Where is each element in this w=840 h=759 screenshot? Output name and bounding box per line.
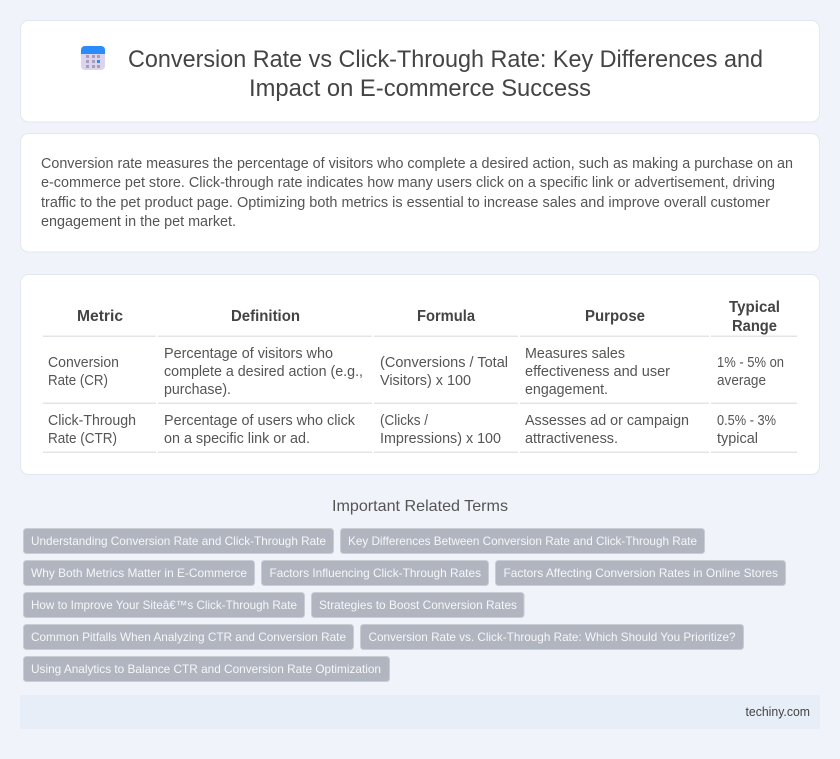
- chip: Factors Affecting Conversion Rates in Online Stores: [504, 566, 778, 580]
- chip: Factors Influencing Click-Through Rates: [270, 566, 481, 580]
- title: Impact on E-commerce Success: [249, 75, 591, 102]
- table row: conversion rate: engagement.: [525, 382, 608, 398]
- table header: Definition: [231, 308, 300, 325]
- table row: click-through rate: Impressions) x 100: [380, 431, 501, 447]
- table row: conversion rate: average: [717, 373, 766, 389]
- table header: Range: [732, 318, 777, 335]
- panel: introduction: [20, 134, 820, 252]
- text block: introduction paragraph: e-commerce pet store. Click-through rate indicates how many users click on a specific link or advertisement, driving: [41, 175, 775, 191]
- table row: click-through rate: Percentage of users who click: [164, 413, 356, 429]
- table row: conversion rate: Percentage of visitors who: [164, 346, 333, 362]
- heading: important related terms: Important Related Terms: [332, 498, 508, 515]
- table row: conversion rate: Rate (CR): [48, 373, 108, 389]
- table row: click-through rate: typical: [717, 431, 758, 447]
- table row: click-through rate: Click-Through: [48, 413, 136, 429]
- table row: conversion rate: Visitors) x 100: [380, 373, 471, 389]
- chip: [24, 560, 254, 586]
- panel: comparison table: [20, 274, 820, 474]
- chip: [24, 624, 354, 650]
- table row: click-through rate: Rate (CTR): [48, 431, 117, 447]
- table header: [77, 299, 780, 335]
- table row: click-through rate: [48, 413, 776, 447]
- chip: Why Both Metrics Matter in E-Commerce: [31, 566, 247, 580]
- title: [128, 46, 763, 102]
- chip: [262, 560, 488, 586]
- table row: click-through rate: (Clicks /: [380, 413, 428, 429]
- chip: [24, 656, 390, 682]
- table header: Metric: [77, 308, 123, 325]
- table row: conversion rate: [48, 346, 784, 398]
- chip: [24, 592, 304, 618]
- table row: conversion rate: (Conversions / Total: [380, 355, 508, 371]
- chip: [340, 528, 704, 554]
- table row: click-through rate: attractiveness.: [525, 431, 618, 447]
- text block: introduction paragraph: [41, 156, 793, 230]
- table header: Purpose: [585, 308, 645, 325]
- text block: introduction paragraph: traffic to the pet product page. Optimizing both metrics is essential to increase sales and improve overall customer: [41, 195, 770, 211]
- table row: conversion rate: 1% - 5% on: [717, 355, 784, 371]
- panel: related term chips: [24, 528, 786, 682]
- chip: How to Improve Your Siteâ€™s Click-Through Rate: [31, 598, 297, 612]
- chip: Strategies to Boost Conversion Rates: [319, 598, 517, 612]
- chip: [312, 592, 524, 618]
- footer: techiny.com: [746, 704, 810, 719]
- chip: [496, 560, 786, 586]
- chip: [24, 528, 334, 554]
- chip: Conversion Rate vs. Click-Through Rate: Which Should You Prioritize?: [368, 630, 736, 644]
- table row: click-through rate: on a specific link or ad.: [164, 431, 310, 447]
- table row: click-through rate: Assesses ad or campaign: [525, 413, 689, 429]
- table row: click-through rate: 0.5% - 3%: [717, 413, 776, 429]
- icon: calendar: [81, 46, 105, 70]
- title: Conversion Rate vs Click-Through Rate: Key Differences and: [128, 46, 763, 73]
- chip: Common Pitfalls When Analyzing CTR and Conversion Rate: [31, 630, 346, 644]
- panel: title card: [20, 20, 820, 122]
- table row: conversion rate: complete a desired action (e.g.,: [164, 364, 363, 380]
- table row: conversion rate: purchase).: [164, 382, 231, 398]
- chip: Understanding Conversion Rate and Click-Through Rate: [31, 534, 326, 548]
- chip: Using Analytics to Balance CTR and Conversion Rate Optimization: [31, 662, 381, 676]
- footer: [20, 695, 820, 729]
- chip: [360, 624, 744, 650]
- table row: conversion rate: Conversion: [48, 355, 119, 371]
- table row: conversion rate: effectiveness and user: [525, 364, 670, 380]
- text block: introduction paragraph: engagement in the pet market.: [41, 214, 236, 230]
- table header: Formula: [417, 308, 475, 325]
- table row: conversion rate: Measures sales: [525, 346, 625, 362]
- text block: introduction paragraph: Conversion rate measures the percentage of visitors who complete a desired action, such as making a purchase on an: [41, 156, 793, 172]
- table header: Typical: [729, 299, 780, 316]
- chip: Key Differences Between Conversion Rate and Click-Through Rate: [348, 534, 697, 548]
